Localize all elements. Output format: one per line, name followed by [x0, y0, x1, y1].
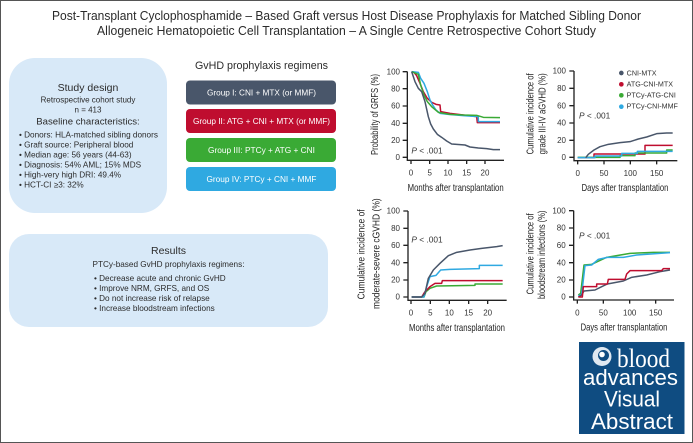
heading: study design: Study design [58, 82, 119, 94]
chart: probability of GRFS [370, 67, 504, 194]
chart: bloodstream infections: bloodstream infections (%) [537, 211, 548, 299]
chart: bloodstream infections [526, 206, 674, 334]
list: baseline characteristics: • Donors: HLA-matched sibling donors [19, 130, 158, 140]
legend: CNI-MTX [627, 69, 657, 77]
chart: moderate-severe cGVHD: 0 [396, 293, 401, 302]
logo: blood advances visual abstract: Abstract [591, 409, 673, 434]
chart: probability of GRFS: 0 [409, 169, 414, 178]
title: Post-Transplant Cyclophosphamide – Based Graft versus Host Disease Prophylaxis for Matched Sibling Donor [52, 9, 641, 23]
chart: bloodstream infections: 100 [623, 308, 637, 317]
text: cohort and sample size [41, 96, 135, 114]
chart: bloodstream infections: 20 [557, 276, 566, 285]
chart: grade III-IV aGVHD: 80 [557, 84, 567, 93]
chart: grade III-IV aGVHD: 60 [557, 101, 567, 110]
chart: probability of GRFS: Probability of GRFS (%) [370, 74, 381, 155]
chart: grade III-IV aGVHD: Days after transplantation [582, 183, 668, 194]
chart: moderate-severe cGVHD [357, 198, 507, 334]
legend: PTCy-ATG-CNI [627, 92, 676, 100]
chart: probability of GRFS: P < .001 [411, 146, 443, 156]
list: baseline characteristics: • Median age: 56 years (44-63) [19, 150, 132, 160]
chart: bloodstream infections: 0 [561, 293, 566, 302]
panel: results [9, 234, 328, 327]
chart: bloodstream infections: 100 [552, 206, 566, 215]
group IV box: Group IV: PTCy + CNI + MMF [206, 174, 316, 184]
chart: grade III-IV aGVHD: 150 [650, 169, 664, 178]
group III box: Group III: PTCy + ATG + CNI [208, 145, 315, 155]
text: cohort and sample size: n = 413 [75, 106, 102, 114]
heading: results: Results [151, 245, 186, 257]
legend [619, 69, 679, 111]
chart: grade III-IV aGVHD: 40 [557, 119, 567, 128]
chart: probability of GRFS: 60 [391, 102, 401, 111]
list: results [94, 274, 226, 313]
list: baseline characteristics: • Diagnosis: 54% AML; 15% MDS [19, 160, 142, 170]
chart: moderate-severe cGVHD: 40 [391, 258, 401, 267]
chart: probability of GRFS: 10 [444, 169, 453, 178]
chart: moderate-severe cGVHD: moderate-severe cGVHD (%) [371, 198, 382, 309]
chart: probability of GRFS: 5 [427, 169, 432, 178]
chart: grade III-IV aGVHD: P < .001 [579, 111, 611, 121]
chart: moderate-severe cGVHD: 5 [428, 309, 433, 318]
group I box: Group I: CNI + MTX (or MMF) [207, 87, 316, 97]
chart: bloodstream infections: 150 [649, 308, 663, 317]
chart: probability of GRFS: Months after transplantation [408, 183, 504, 194]
chart: moderate-severe cGVHD: Months after transplantation [409, 323, 505, 334]
chart: grade III-IV aGVHD: 20 [557, 136, 567, 145]
chart: probability of GRFS: 20 [391, 136, 401, 145]
chart: bloodstream infections: 50 [599, 308, 608, 317]
icon: blood cell [592, 347, 612, 366]
text: cohort and sample size: Retrospective cohort study [41, 96, 135, 104]
chart: moderate-severe cGVHD: P < .001 [411, 235, 443, 245]
list: baseline characteristics: • Graft source: Peripheral blood [19, 140, 134, 150]
logo: blood advances visual abstract: blood [617, 344, 670, 373]
chart: grade III-IV aGVHD: 0 [575, 169, 580, 178]
list: results: • Improve NRM, GRFS, and OS [94, 284, 210, 293]
chart: grade III-IV aGVHD [526, 67, 679, 194]
chart: probability of GRFS: 100 [387, 67, 401, 76]
chart: probability of GRFS: 40 [391, 119, 401, 128]
list: results: • Decrease acute and chronic GvHD [94, 274, 226, 283]
chart: moderate-severe cGVHD: 20 [391, 276, 401, 285]
chart: moderate-severe cGVHD: 80 [391, 224, 401, 233]
chart: grade III-IV aGVHD: Cumulative incidence of [526, 73, 537, 154]
chart: bloodstream infections: 60 [557, 241, 566, 250]
legend: PTCy-CNI-MMF [627, 103, 679, 111]
title [52, 9, 641, 38]
chart: grade III-IV aGVHD: 100 [624, 169, 638, 178]
chart: probability of GRFS: 0 [396, 153, 401, 162]
title: Allogeneic Hematopoietic Cell Transplantation – A Single Centre Retrospective Cohort Study [97, 24, 597, 38]
list: baseline characteristics [19, 130, 158, 190]
chart: probability of GRFS: 80 [391, 85, 401, 94]
text: results intro: PTCy-based GvHD prophylaxis regimens: [93, 260, 244, 269]
chart: moderate-severe cGVHD: Cumulative incidence of [357, 209, 368, 299]
logo: blood advances visual abstract [579, 342, 684, 434]
chart: bloodstream infections: P < .001 [579, 231, 611, 241]
chart: bloodstream infections: Days after transplantation [581, 323, 667, 334]
chart: moderate-severe cGVHD: 20 [483, 309, 493, 318]
chart: bloodstream infections: Cumulative incidence of [526, 213, 537, 294]
list: results: • Increase bloodstream infections [94, 304, 215, 313]
chart: grade III-IV aGVHD: grade III-IV aGVHD (%) [538, 73, 549, 154]
group II box [186, 109, 336, 133]
heading: regimens: GvHD prophylaxis regimens [195, 60, 328, 72]
chart: moderate-severe cGVHD: 10 [445, 309, 454, 318]
chart: grade III-IV aGVHD: 100 [553, 67, 567, 76]
chart: grade III-IV aGVHD: 0 [562, 153, 567, 162]
logo: blood advances visual abstract: advances [583, 365, 678, 390]
list: baseline characteristics: • HCT-CI ≥3: 32% [19, 180, 84, 190]
group III box [186, 138, 336, 162]
legend: ATG-CNI-MTX [627, 81, 673, 89]
chart: bloodstream infections: 0 [575, 308, 580, 317]
chart: probability of GRFS: 15 [462, 169, 472, 178]
logo: blood advances visual abstract: Visual [604, 386, 660, 412]
chart: probability of GRFS: 20 [481, 169, 490, 178]
heading: baseline characteristics: Baseline characteristics: [36, 116, 140, 128]
group II box: Group II: ATG + CNI + MTX (or MMF) [193, 116, 330, 126]
chart: moderate-severe cGVHD: 15 [464, 309, 474, 318]
chart: bloodstream infections: 80 [557, 224, 566, 233]
chart: moderate-severe cGVHD: 100 [387, 207, 401, 216]
list: baseline characteristics: • High-very high DRI: 49.4% [19, 170, 121, 180]
group I box [186, 80, 336, 104]
chart: bloodstream infections: 40 [557, 258, 566, 267]
panel: GvHD prophylaxis regimens [186, 60, 336, 191]
list: results: • Do not increase risk of relapse [94, 294, 210, 303]
chart: moderate-severe cGVHD: 0 [409, 309, 414, 318]
chart: moderate-severe cGVHD: 60 [391, 241, 401, 250]
panel: study design [9, 58, 167, 213]
chart: grade III-IV aGVHD: 50 [600, 169, 609, 178]
group IV box [186, 167, 336, 191]
